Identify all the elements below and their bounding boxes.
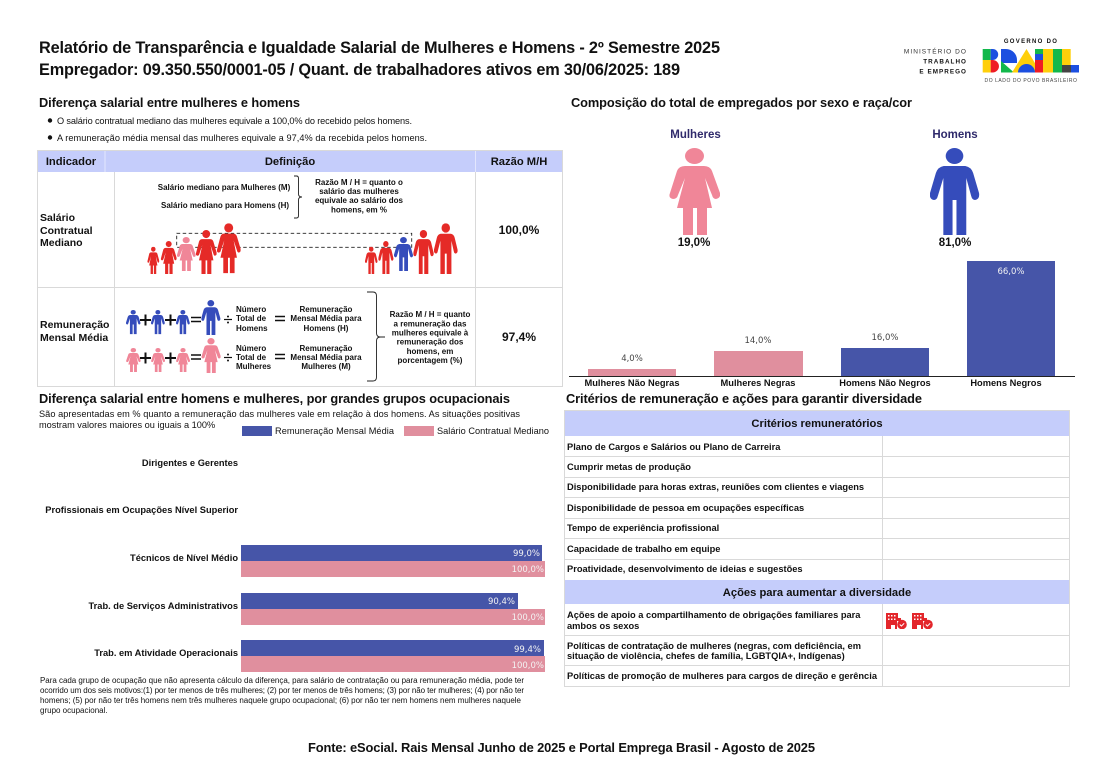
bar chart: sexo e raça: Mulheres Negras	[721, 378, 795, 388]
median ratio explanation: Razão M / H = quanto o	[315, 178, 403, 187]
occupational bar chart: 99,4%	[514, 645, 541, 655]
action rows: Ações de apoio a compartilhamento de obrigações familiares para	[567, 610, 861, 620]
bar chart: sexo e raça: 16,0%	[871, 333, 899, 343]
bar chart: sexo e raça: 14,0%	[744, 336, 772, 346]
remuneration ratio explanation: porcentagem (%)	[398, 356, 463, 365]
bullet text block: O salário contratual mediano das mulheres equivale a 100,0% do recebido pelos homens.	[57, 116, 412, 126]
median formula text	[158, 183, 291, 210]
header: ações	[565, 580, 1069, 604]
action rows: ambos os sexos	[567, 621, 639, 631]
remuneration ratio explanation: Razão M / H = quanto	[390, 310, 470, 319]
formula: men: Número	[236, 305, 266, 314]
formula: men	[126, 300, 362, 335]
panel: women share: 19,0%	[678, 237, 710, 249]
heading: composição: Composição do total de empregados por sexo e raça/cor	[571, 95, 912, 110]
action rows: Políticas de contratação de mulheres (negras, com deficiência, em	[567, 641, 861, 651]
bar chart: sexo e raça	[569, 261, 1075, 388]
formula: women: Mensal Média para	[290, 353, 362, 362]
heading: grupos ocupacionais: Diferença salarial entre homens e mulheres, por grandes grupos ocupacionais	[39, 391, 510, 406]
logo: Ministério do Trabalho e Emprego: E EMPREGO	[919, 68, 967, 76]
row label: salário contratual mediano: Salário	[40, 212, 75, 224]
formula: men: Homens	[236, 324, 268, 333]
table header: Definição	[265, 156, 315, 168]
occupational bar chart: Trab. de Serviços Administrativos	[88, 601, 238, 611]
criteria rows: Disponibilidade para horas extras, reuniões com clientes e viagens	[567, 482, 864, 492]
formula: women: Número	[236, 344, 266, 353]
brace: remuneration	[367, 292, 385, 381]
bar chart: sexo e raça: Homens Negros	[970, 378, 1042, 388]
criteria rows: Plano de Cargos e Salários ou Plano de Carreira	[567, 442, 781, 452]
criteria rows: Cumprir metas de produção	[567, 462, 691, 472]
median formula text: Salário mediano para Homens (H)	[161, 201, 289, 210]
heading: diferença salarial: Diferença salarial entre mulheres e homens	[39, 95, 300, 110]
row label: remuneração mensal média	[40, 319, 109, 344]
criteria rows: Capacidade de trabalho em equipe	[567, 544, 720, 554]
footnote: Para cada grupo de ocupação que não apresenta cálculo da diferença, para salário de contratação ou para remuneração média, pode ter	[40, 676, 524, 685]
occupational bar chart: Dirigentes e Gerentes	[142, 458, 238, 468]
logo: Governo do Brasil: GOVERNO DO	[1004, 39, 1058, 45]
title	[39, 39, 720, 79]
footnote: homens; (5) por não ter três homens nem três mulheres naquele grupo ocupacional; (6) por não ter nem homens nem mulheres naquele	[40, 696, 522, 705]
bar chart: sexo e raça: Mulheres Não Negras	[584, 378, 680, 388]
row label: salário contratual mediano: Mediano	[40, 237, 83, 249]
criteria rows	[567, 442, 864, 574]
formula: women: Mulheres (M)	[301, 362, 351, 371]
median formula text: Salário mediano para Mulheres (M)	[158, 183, 291, 192]
formula: men: Homens (H)	[304, 324, 349, 333]
footnote: grupo ocupacional.	[40, 706, 108, 715]
formula: women: Remuneração	[300, 344, 353, 353]
occupational bar chart: 99,0%	[513, 549, 540, 559]
value: 100,0%: 100,0%	[499, 223, 540, 237]
occupational bar chart	[45, 458, 545, 672]
icons: company check	[886, 613, 933, 629]
occupational bar chart: 100,0%	[512, 565, 544, 575]
panel: criteria table	[564, 410, 1070, 686]
table header: Indicador	[46, 156, 97, 168]
median dashed selection box	[177, 233, 412, 247]
remuneration ratio explanation: homens, em	[407, 347, 453, 356]
icons: row of men	[365, 223, 458, 274]
header: critérios remuneratórios: Critérios remuneratórios	[751, 418, 883, 430]
row label: remuneração mensal média: Mensal Média	[40, 332, 108, 344]
panel: women share	[669, 129, 721, 249]
occupational bar chart: 90,4%	[488, 597, 515, 607]
action rows	[567, 610, 878, 681]
title: Relatório de Transparência e Igualdade Salarial de Mulheres e Homens - 2º Semestre 2025	[39, 39, 720, 57]
occupational bar chart: Técnicos de Nível Médio	[130, 553, 238, 563]
action rows: Políticas de promoção de mulheres para cargos de direção e gerência	[567, 671, 878, 681]
icons: row of women	[147, 223, 241, 274]
formula: women: Total de	[236, 353, 267, 362]
header: critérios remuneratórios	[565, 411, 1069, 436]
bar chart: sexo e raça: 4,0%	[621, 354, 643, 364]
description text	[39, 409, 520, 430]
logo: Governo do Brasil	[983, 39, 1079, 84]
criteria rows: Tempo de experiência profissional	[567, 523, 719, 533]
table header	[38, 151, 562, 172]
title: Empregador: 09.350.550/0001-05 / Quant. de trabalhadores ativos em 30/06/2025: 189	[39, 61, 680, 79]
footnote: ocorrido um dos seis motivos:(1) por ter menos de três mulheres; (2) por ter menos de três homens; (3) por não ter mulheres; (4) por não ter	[40, 686, 524, 695]
logo: Ministério do Trabalho e Emprego: MINISTÉRIO DO	[904, 46, 967, 56]
logo: Ministério do Trabalho e Emprego	[904, 46, 967, 76]
median ratio explanation: homens, em %	[331, 205, 387, 214]
bar chart: sexo e raça: Homens Não Negros	[839, 378, 931, 388]
value: 97,4%: 97,4%	[502, 330, 536, 344]
legend: Remuneração Mensal Média	[275, 426, 395, 436]
occupational bar chart: Trab. em Atividade Operacionais	[94, 648, 238, 658]
action rows: situação de violência, chefes de família, LGBTQIA+, Indígenas)	[567, 651, 845, 661]
source: Fonte: eSocial. Rais Mensal Junho de 2025 e Portal Emprega Brasil - Agosto de 2025	[308, 740, 815, 755]
median ratio explanation: salário das mulheres	[319, 187, 399, 196]
occupational bar chart: 100,0%	[512, 661, 544, 671]
heading: critérios: Critérios de remuneração e ações para garantir diversidade	[566, 391, 922, 406]
panel: men share: Homens	[932, 129, 978, 141]
panel: men share: 81,0%	[939, 237, 971, 249]
logo: Governo do Brasil: DO LADO DO POVO BRASILEIRO	[985, 78, 1077, 84]
row label: salário contratual mediano	[40, 212, 93, 249]
panel: indicator table	[38, 150, 562, 386]
occupational bar chart: Profissionais em Ocupações Nível Superior	[45, 505, 238, 515]
description text: São apresentadas em % quanto a remuneração das mulheres vale em relação à dos homens. As situações positivas	[39, 409, 520, 419]
formula: women: Mulheres	[236, 362, 272, 371]
formula: men: Mensal Média para	[290, 314, 362, 323]
median ratio explanation	[315, 178, 404, 214]
table header: Razão M/H	[491, 156, 547, 168]
panel: women share: Mulheres	[670, 129, 721, 141]
row label: remuneração mensal média: Remuneração	[40, 319, 109, 331]
logo: Ministério do Trabalho e Emprego: TRABALHO	[923, 58, 967, 66]
header: ações: Ações para aumentar a diversidade	[723, 587, 911, 599]
row label: salário contratual mediano: Contratual	[40, 225, 93, 237]
bullet text block	[48, 116, 427, 143]
criteria rows: Disponibilidade de pessoa em ocupações específicas	[567, 503, 804, 513]
description text: mostram valores maiores ou iguais a 100%	[39, 420, 215, 430]
median ratio explanation: equivale ao salário dos	[315, 196, 404, 205]
legend	[242, 426, 549, 436]
criteria rows: Proatividade, desenvolvimento de ideias e sugestões	[567, 564, 803, 574]
remuneration ratio explanation	[390, 310, 470, 365]
formula: women	[126, 338, 362, 373]
panel: men share	[930, 129, 979, 249]
remuneration ratio explanation: remuneração dos	[397, 337, 464, 346]
formula: men: Remuneração	[300, 305, 353, 314]
bullet text block: A remuneração média mensal das mulheres equivale a 97,4% da recebida pelos homens.	[57, 133, 427, 143]
formula: men: Total de	[236, 314, 267, 323]
remuneration ratio explanation: a remuneração das	[394, 319, 467, 328]
footnote	[40, 676, 524, 715]
remuneration ratio explanation: mulheres equivale à	[392, 328, 469, 337]
legend: Salário Contratual Mediano	[437, 426, 549, 436]
occupational bar chart: 100,0%	[512, 613, 544, 623]
brace: median	[294, 176, 302, 218]
bar chart: sexo e raça: 66,0%	[997, 267, 1025, 277]
